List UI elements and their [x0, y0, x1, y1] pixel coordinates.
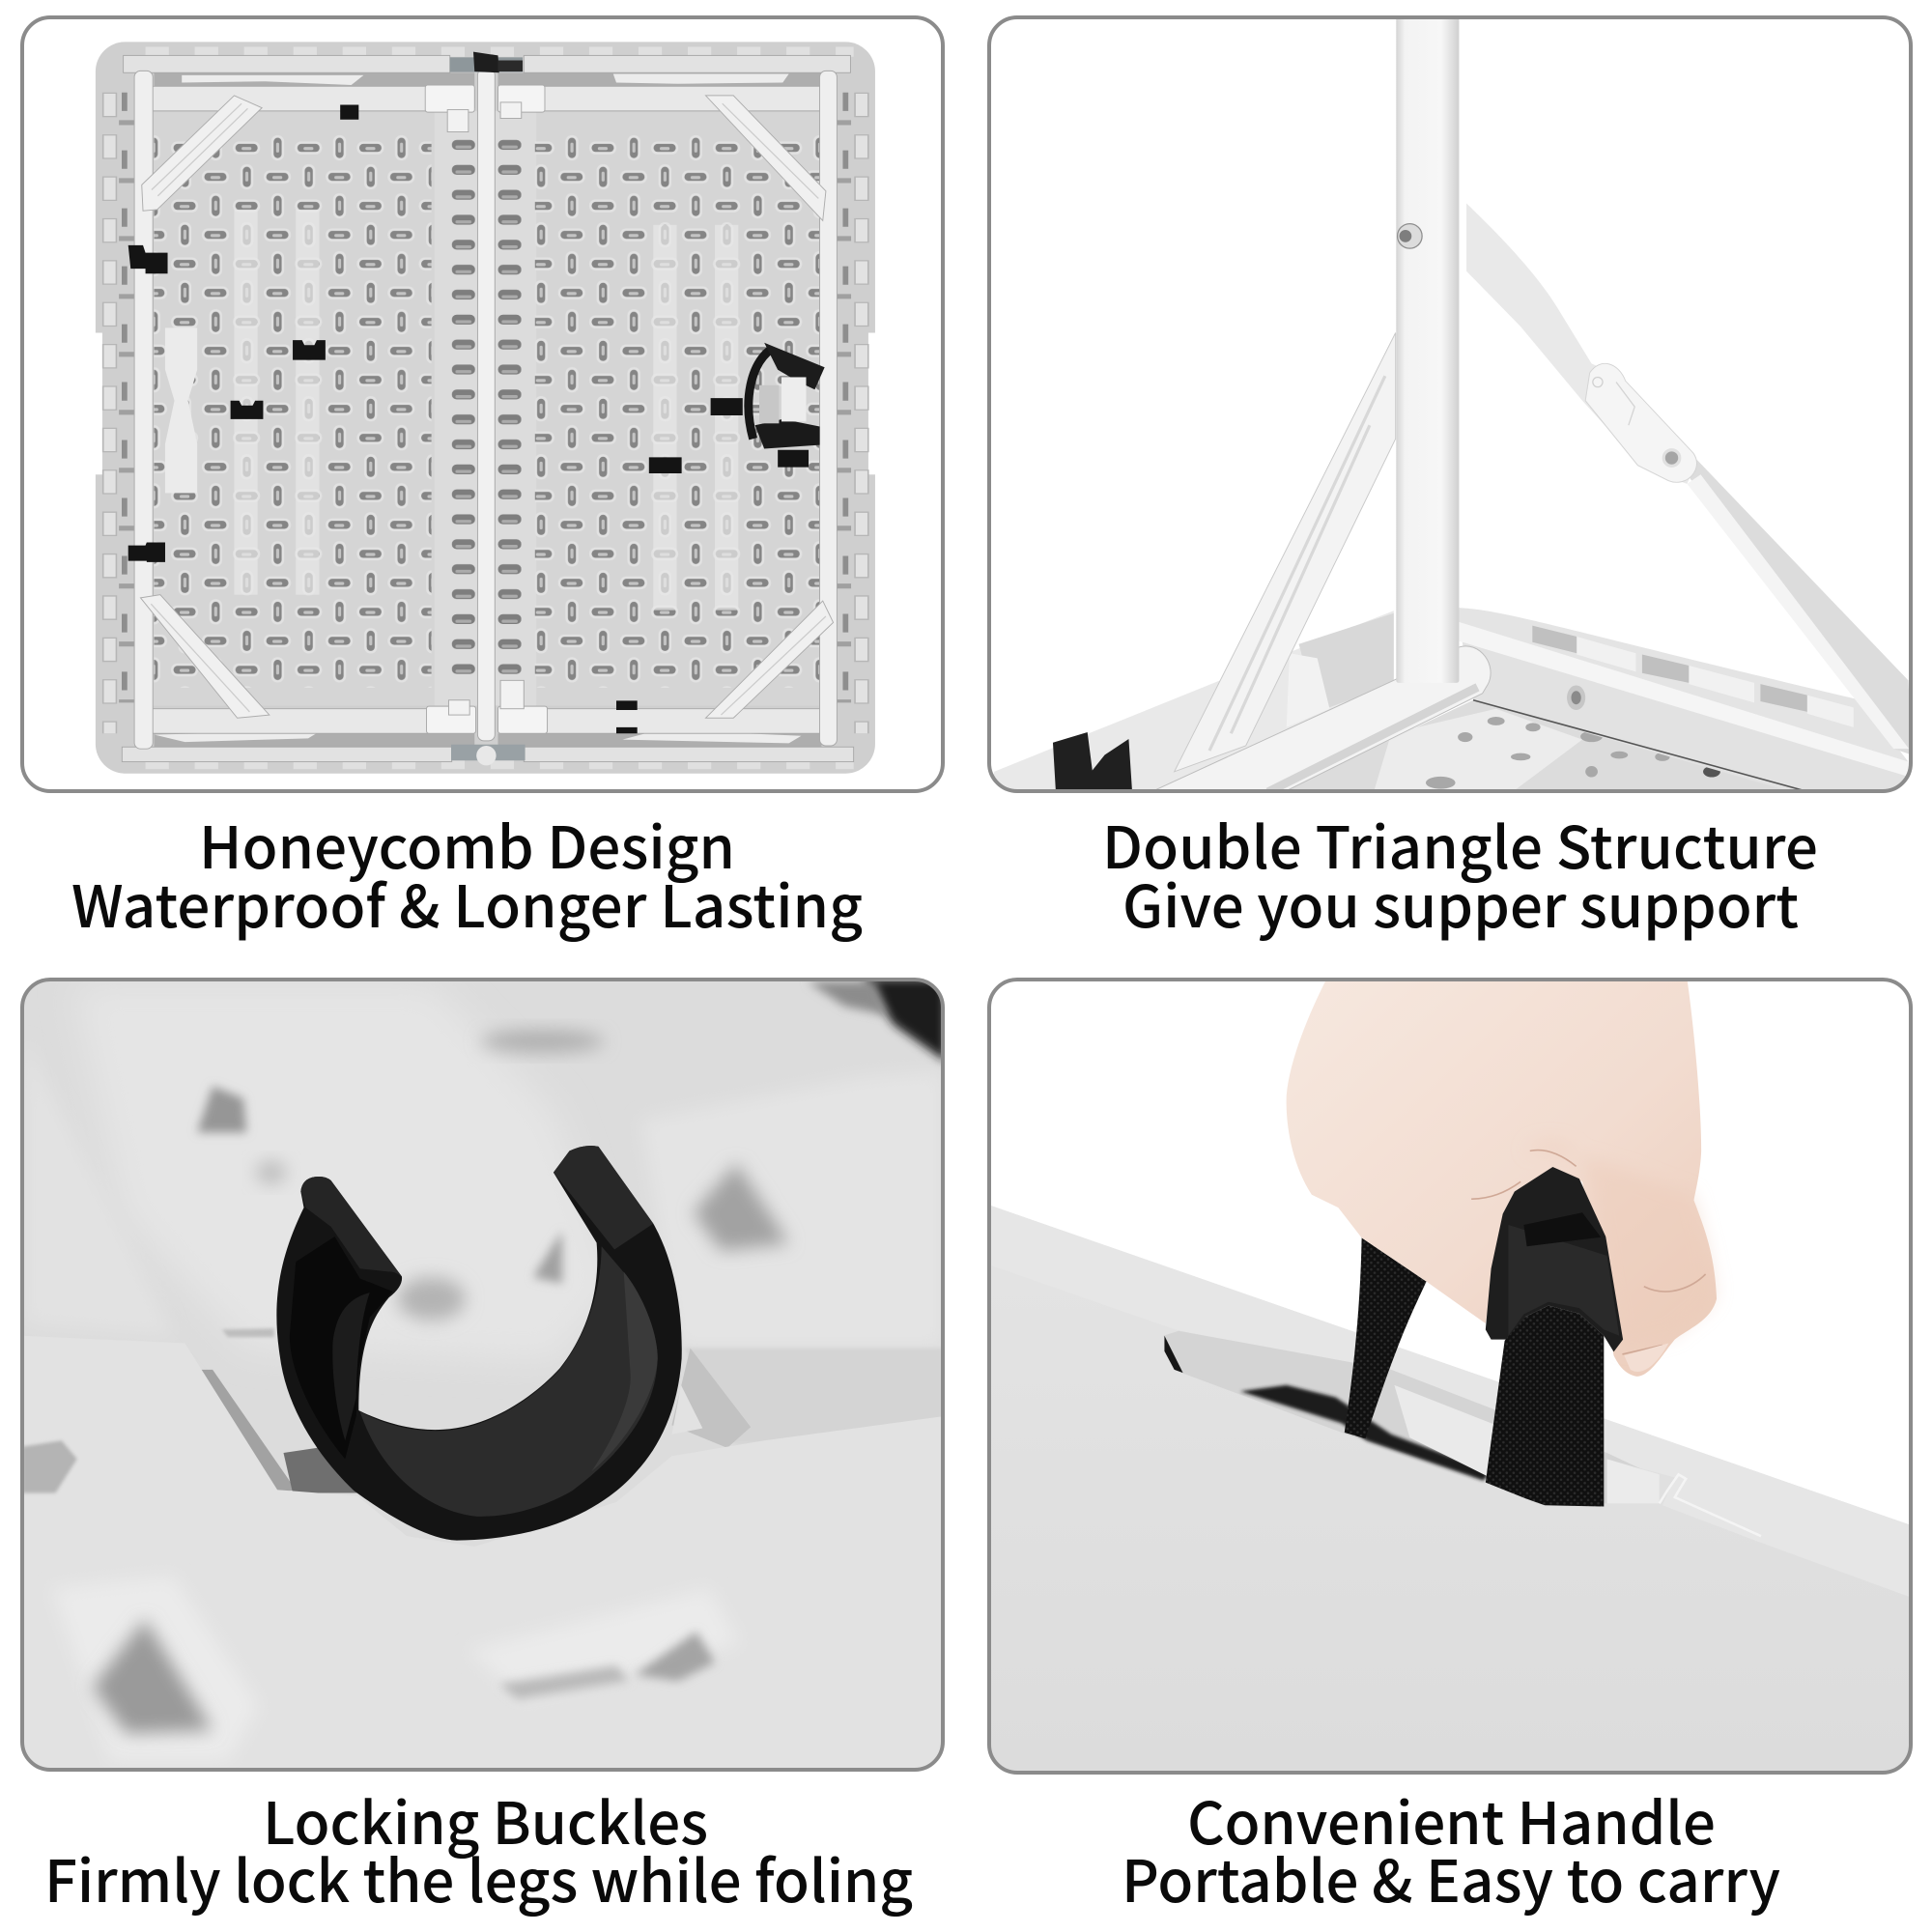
- upright tube: [1396, 6, 1459, 683]
- handle recess: [1163, 1331, 1761, 1536]
- caption: honeycomb: [71, 802, 863, 945]
- black locking clip: [276, 1146, 682, 1541]
- table plate far side: [1459, 608, 1909, 762]
- table edge strip: [989, 1206, 1912, 1598]
- caption: convenient handle: Portable & Easy to carry: [1122, 1835, 1780, 1919]
- right brace lower: [1687, 459, 1912, 755]
- table plate underside: [1291, 700, 1782, 789]
- panel frame: handle: [989, 980, 1911, 1773]
- tube bolt: [1398, 224, 1422, 248]
- foot tube: [1142, 646, 1491, 796]
- panel: double triangle leg: [988, 6, 1912, 798]
- blurred table relief: [104, 981, 941, 1338]
- panel frame: triangle: [989, 17, 1911, 791]
- panel frame: honeycomb: [22, 17, 943, 791]
- folded carry handle: [749, 343, 825, 448]
- table rim: [91, 42, 879, 774]
- panel: honeycomb table underside: [91, 42, 879, 774]
- black leg clips: [128, 104, 809, 733]
- corner braces: [140, 96, 834, 718]
- caption: honeycomb: Waterproof & Longer Lasting: [71, 861, 863, 945]
- caption: locking buckles: [44, 1777, 913, 1919]
- caption: convenient handle: Convenient Handle: [1187, 1777, 1716, 1861]
- wide strap: [1486, 1306, 1604, 1507]
- caption: honeycomb: Honeycomb Design: [199, 802, 735, 886]
- black handle grip: [1486, 1167, 1623, 1351]
- panel: carry handle: [989, 979, 1912, 1775]
- hand: [1287, 979, 1717, 1377]
- hinge brackets: [450, 52, 526, 765]
- caption: locking buckles: Firmly lock the legs while foling: [44, 1835, 913, 1919]
- black clips: [1053, 732, 1132, 795]
- thin strap: [1345, 1237, 1427, 1438]
- caption: double triangle: [1102, 802, 1818, 945]
- rail screw: [1567, 685, 1585, 710]
- metal slot: [197, 1349, 751, 1492]
- table top: [991, 1265, 1909, 1771]
- right brace hinge: [1585, 363, 1696, 482]
- table foreground: [197, 1370, 941, 1493]
- caption: double triangle: Give you supper support: [1122, 861, 1799, 945]
- right brace upper: [1466, 204, 1696, 484]
- bottom rail: [1459, 622, 1912, 798]
- honeycomb slots surface: [153, 111, 821, 706]
- steel frame tubes: [122, 55, 854, 762]
- foreground holes: [22, 1440, 740, 1761]
- hinge latches: [447, 102, 524, 715]
- shadow gaps and folding arms: [155, 72, 821, 747]
- caption: convenient handle: [1122, 1777, 1780, 1919]
- caption: double triangle: Double Triangle Structure: [1102, 802, 1818, 886]
- table plate left side: [988, 611, 1394, 795]
- left brace: [1175, 333, 1396, 772]
- caption: locking buckles: Locking Buckles: [263, 1777, 708, 1861]
- panel: locking buckle: [18, 976, 950, 1774]
- panel frame: buckle: [22, 980, 943, 1770]
- reinforcing channels: [165, 210, 738, 611]
